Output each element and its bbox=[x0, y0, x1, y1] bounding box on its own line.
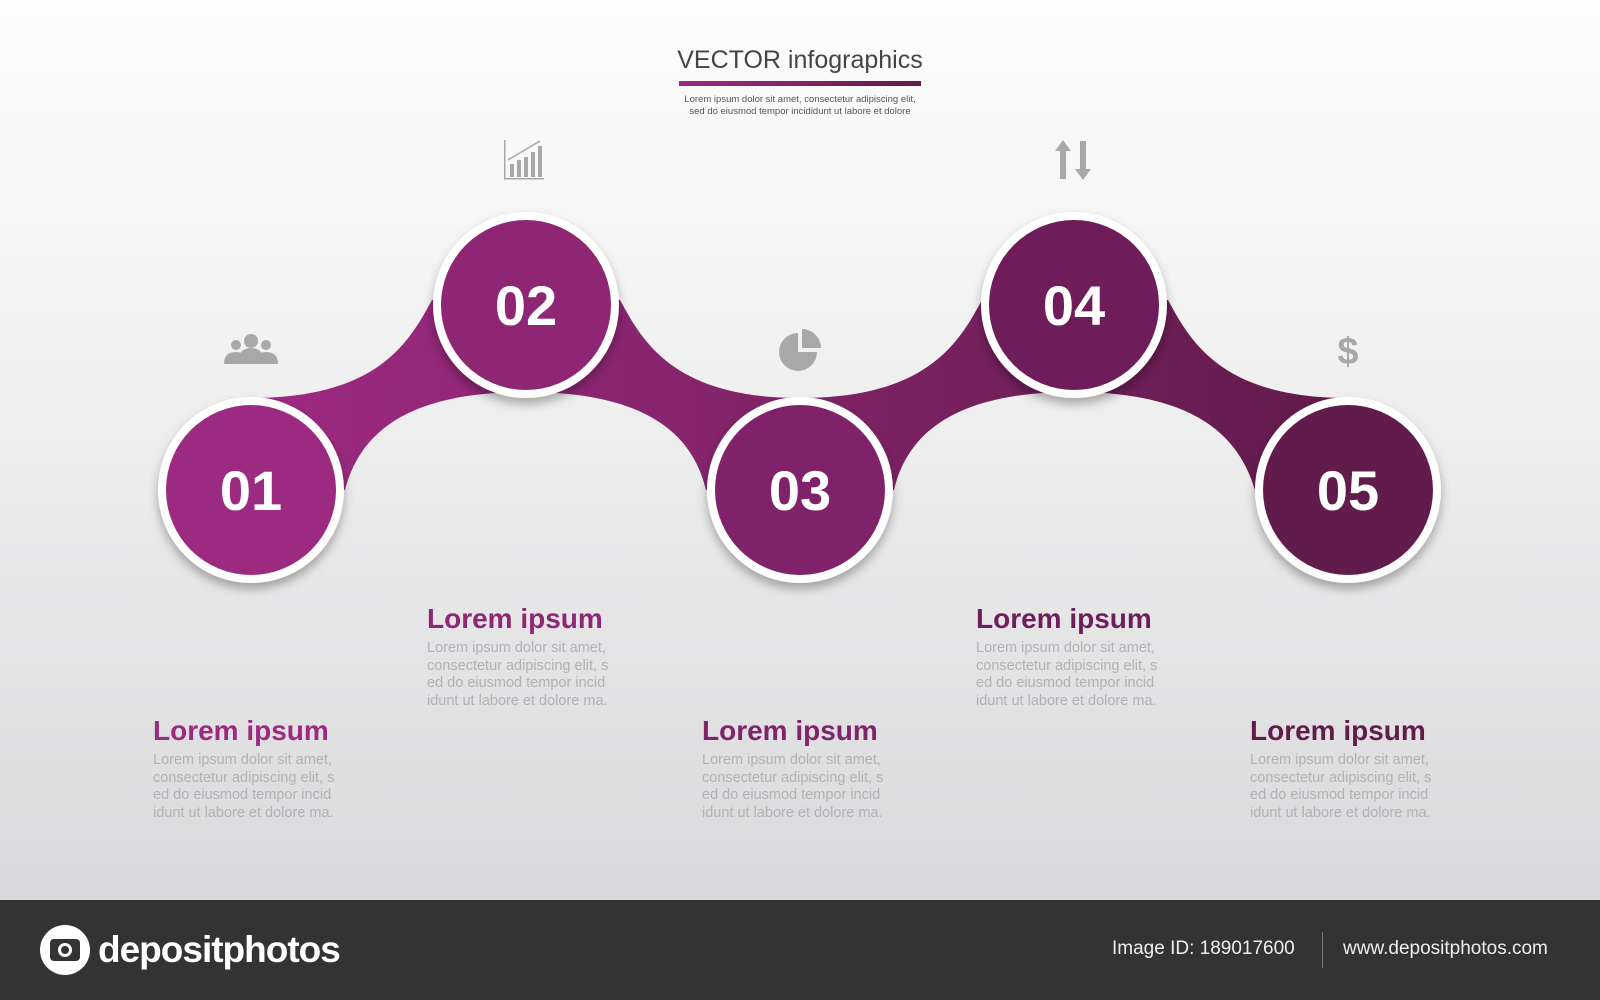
text block 05: idunt ut labore et dolore ma. bbox=[1250, 805, 1431, 821]
circle 03 bbox=[707, 397, 893, 583]
text block 03: ed do eiusmod tempor incid bbox=[702, 787, 880, 803]
icon: pie chart bbox=[779, 329, 821, 371]
icon: people bbox=[224, 334, 278, 364]
text block 03: Lorem ipsum bbox=[702, 715, 878, 746]
logo bbox=[40, 925, 340, 975]
icon: dollar: $ bbox=[1337, 331, 1359, 373]
logo: depositphotos bbox=[98, 929, 340, 970]
circle 01: 01 bbox=[220, 459, 282, 522]
text block 04: consectetur adipiscing elit, s bbox=[976, 658, 1157, 674]
icon: arrows up/down bbox=[1055, 140, 1091, 180]
title: sed do eiusmod tempor incididunt ut labore et dolore bbox=[689, 106, 911, 117]
text block 05: consectetur adipiscing elit, s bbox=[1250, 770, 1431, 786]
text block 01: Lorem ipsum bbox=[153, 715, 329, 746]
circle 02 bbox=[433, 212, 619, 398]
circle 05: 05 bbox=[1317, 459, 1379, 522]
title: Lorem ipsum dolor sit amet, consectetur adipiscing elit, bbox=[684, 94, 916, 105]
text block 04: idunt ut labore et dolore ma. bbox=[976, 693, 1157, 709]
text block 05: Lorem ipsum bbox=[1250, 715, 1426, 746]
text block 01: Lorem ipsum dolor sit amet, bbox=[153, 752, 332, 768]
text block 04 bbox=[976, 603, 1157, 709]
text block 03 bbox=[702, 715, 883, 821]
circle 05 bbox=[1255, 397, 1441, 583]
text block 04: Lorem ipsum dolor sit amet, bbox=[976, 640, 1155, 656]
text block 05: Lorem ipsum dolor sit amet, bbox=[1250, 752, 1429, 768]
text block 01 bbox=[153, 715, 334, 821]
text block 02 bbox=[427, 603, 608, 709]
circle 04 bbox=[981, 212, 1167, 398]
website: www.depositphotos.com bbox=[1343, 938, 1548, 959]
icon: bar chart bbox=[504, 140, 544, 180]
footer bar bbox=[0, 900, 1600, 1000]
text block 05: ed do eiusmod tempor incid bbox=[1250, 787, 1428, 803]
text block 01: ed do eiusmod tempor incid bbox=[153, 787, 331, 803]
text block 04: ed do eiusmod tempor incid bbox=[976, 675, 1154, 691]
text block 02: ed do eiusmod tempor incid bbox=[427, 675, 605, 691]
circle 04: 04 bbox=[1043, 274, 1105, 337]
circle 02: 02 bbox=[495, 274, 557, 337]
text block 02: idunt ut labore et dolore ma. bbox=[427, 693, 608, 709]
image id: Image ID: 189017600 bbox=[1112, 938, 1295, 959]
circle 03: 03 bbox=[769, 459, 831, 522]
text block 02: consectetur adipiscing elit, s bbox=[427, 658, 608, 674]
text block 01: consectetur adipiscing elit, s bbox=[153, 770, 334, 786]
text block 03: idunt ut labore et dolore ma. bbox=[702, 805, 883, 821]
text block 02: Lorem ipsum dolor sit amet, bbox=[427, 640, 606, 656]
text block 04: Lorem ipsum bbox=[976, 603, 1152, 634]
title: VECTOR infographics bbox=[677, 46, 923, 74]
text block 03: Lorem ipsum dolor sit amet, bbox=[702, 752, 881, 768]
connector band bbox=[251, 300, 1348, 490]
title bbox=[677, 46, 923, 117]
text block 05 bbox=[1250, 715, 1431, 821]
circle 01 bbox=[158, 397, 344, 583]
text block 02: Lorem ipsum bbox=[427, 603, 603, 634]
text block 03: consectetur adipiscing elit, s bbox=[702, 770, 883, 786]
text block 01: idunt ut labore et dolore ma. bbox=[153, 805, 334, 821]
